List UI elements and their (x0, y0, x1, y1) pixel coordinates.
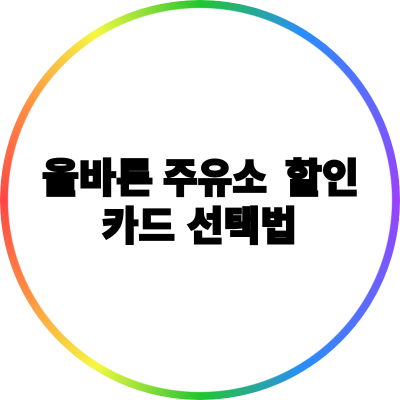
title line 1: 할인 (285, 157, 359, 201)
title line 2: 카드 (102, 205, 175, 249)
title line 2: 선택법 (187, 205, 297, 249)
title line 1 (42, 157, 359, 201)
title line 1: 주유소 (163, 157, 267, 201)
title line 2 (102, 205, 297, 249)
title line 1: 올바른 (42, 157, 153, 201)
